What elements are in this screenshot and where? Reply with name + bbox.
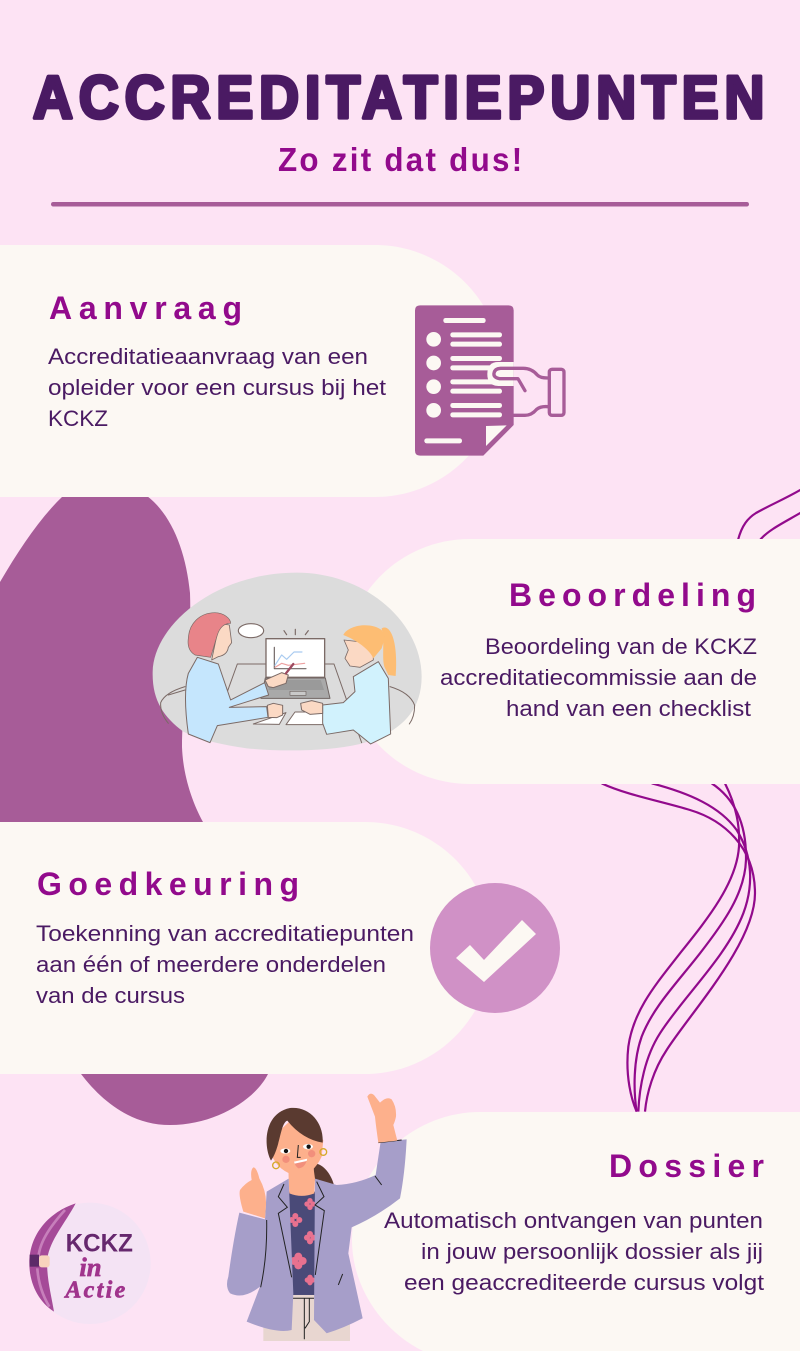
text block: Toekenning van accreditatiepunten [36,921,414,946]
panel: Beoordeling [345,539,800,784]
text block [440,634,757,721]
heading: Beoordeling [509,577,756,613]
logo: KCKZ in Actie: KCKZ [66,1230,133,1257]
text block: aan één of meerdere onderdelen [36,952,386,977]
decorative waves [602,489,800,1112]
text block [384,1208,764,1295]
heading: Goedkeuring [37,866,299,902]
panel background [0,822,492,1074]
text block: een geaccrediteerde cursus volgt [404,1270,764,1295]
illustration: woman giving thumbs up [227,1094,407,1341]
text block: in jouw persoonlijk dossier als jij [421,1239,763,1264]
text block: KCKZ [48,406,108,431]
heading: Aanvraag [49,290,242,326]
panel background [0,245,502,497]
text block [48,344,386,431]
panel: Goedkeuring [0,822,492,1074]
text block [36,921,414,1008]
icon: check mark [430,883,560,1013]
text block: hand van een checklist [506,696,751,721]
logo: KCKZ in Actie [29,1203,151,1324]
title divider [51,202,749,206]
title: ACCREDITATIEPUNTEN [33,65,764,132]
background blob [0,496,268,1125]
panel background [352,1112,800,1351]
logo: KCKZ in Actie: Actie [63,1277,126,1303]
subtitle: Zo zit dat dus! [278,141,522,178]
panel background [345,539,800,784]
text block: Beoordeling van de KCKZ [485,634,757,659]
text block: van de cursus [36,983,185,1008]
illustration: two women discussing a chart [153,573,422,750]
icon: checklist document with hand [415,305,564,456]
panel: Dossier [352,1112,800,1351]
text block: Accreditatieaanvraag van een [48,344,368,369]
logo: KCKZ in Actie: in [79,1252,102,1282]
text block: opleider voor een cursus bij het [48,375,386,400]
text block: Automatisch ontvangen van punten [384,1208,763,1233]
text block: accreditatiecommissie aan de [440,665,757,690]
heading: Dossier [609,1148,764,1184]
panel: Aanvraag [0,245,502,497]
